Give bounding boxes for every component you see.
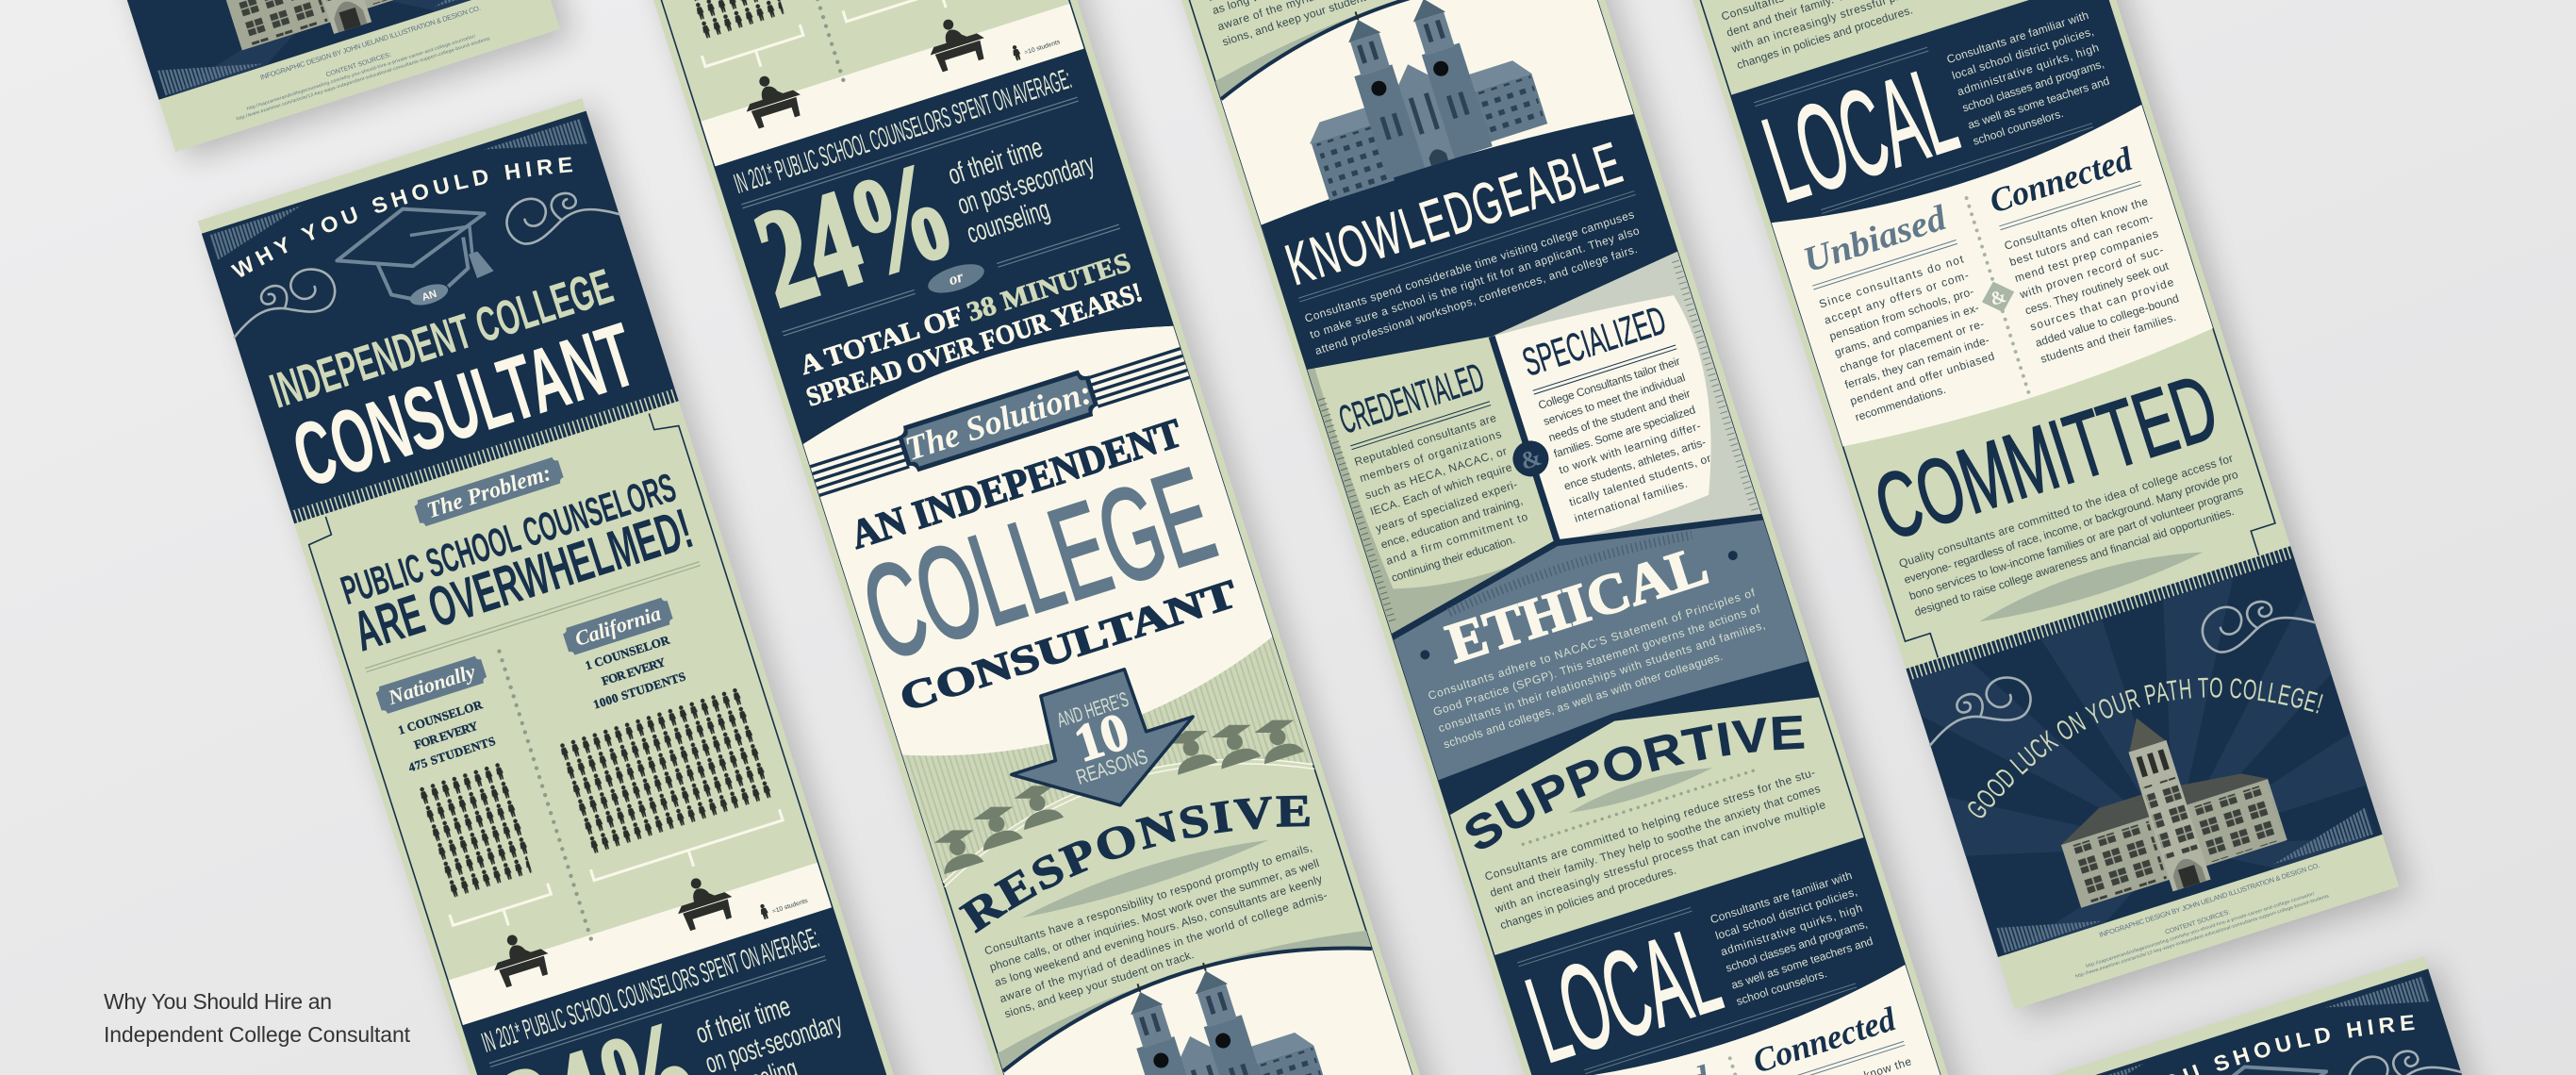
body: committed <box>1897 452 2251 619</box>
body: committed: designed to raise college awareness and financial aid opportunities. <box>1913 504 2236 619</box>
credits: INFOGRAPHIC DESIGN BY JOHN UELAND ILLUSTRATION & DESIGN CO. <box>2098 861 2320 939</box>
section: credentialed and specialized <box>1307 252 1762 636</box>
section: closing footer <box>1907 546 2383 980</box>
arrow: ten reasons: AND HERE'S <box>1054 687 1131 732</box>
heading: independent college: INDEPENDENT COLLEGE <box>264 259 619 420</box>
column: unbiased: recommendations. <box>1854 383 1947 424</box>
icon: graduation cap <box>328 186 505 326</box>
panel: credentialed: years of specialized experi- <box>1374 477 1519 536</box>
column: connected: added value to college-bound <box>2034 291 2181 350</box>
section: knowledgeable <box>1208 0 1685 393</box>
poster slice: column four, closing reasons <box>1687 0 2419 1026</box>
body: ethical: Good Practice (SPGP). This statement governs the actions of <box>1431 602 1762 719</box>
big number: 24 percent: 24% <box>740 132 969 336</box>
poster slice: header fragment, bottom right <box>2039 953 2530 1075</box>
column: unbiased: ferrals, they can remain inde- <box>1843 333 1990 391</box>
panel: credentialed: members of organizations <box>1358 427 1503 485</box>
swirl ornaments <box>1918 582 2315 746</box>
icons: graduates <box>925 699 1306 874</box>
body: local: administrative quirks, high <box>1956 41 2101 98</box>
poster slice: column one, header and problem <box>198 97 918 1075</box>
heading: committed: COMMITTED <box>1863 354 2229 559</box>
body: supportive: changes in policies and procedures. <box>1735 3 1914 72</box>
heading: college: COLLEGE <box>847 439 1230 688</box>
credits: http://sapcareerandcollegecounseling.com/why-you-should-hire-a-private-career-and-college-counselor/ <box>2086 891 2316 969</box>
body: local: school classes and programs, <box>1960 57 2105 115</box>
lens under responsive <box>1018 829 1271 925</box>
panel: credentialed: ence, education and training, <box>1379 494 1524 552</box>
body: ethical: Consultants adhere to NACAC'S Statement of Principles of <box>1427 586 1757 703</box>
column: connected <box>1984 139 2187 366</box>
stripes beside banner <box>810 349 1190 495</box>
panel: credentialed: continuing their education. <box>1390 533 1517 585</box>
arrow: ten reasons: REASONS <box>1073 744 1150 789</box>
panel: credentialed: and a firm commitment to <box>1384 510 1529 568</box>
body: ethical: schools and colleges, as well as with other colleagues. <box>1442 650 1725 751</box>
section: solution <box>803 326 1329 1020</box>
section: header <box>202 111 679 524</box>
heading: knowledgeable: KNOWLEDGEABLE <box>1279 130 1631 298</box>
body: knowledgeable: attend professional workshops, conferences, and college fairs. <box>1313 242 1639 357</box>
panel: specialized: tically talented students, or <box>1567 452 1712 509</box>
column: connected: best tutors and can recom- <box>2007 210 2155 269</box>
panel: specialized: ence students, athletes, artis- <box>1562 436 1708 493</box>
swirl ornaments <box>222 174 619 338</box>
panel: california <box>519 583 806 954</box>
column: unbiased: change for placement or re- <box>1838 317 1986 375</box>
body: responsive <box>983 840 1335 1020</box>
body: responsive: phone calls, or other inquiries. Most work over the summer, as well <box>988 856 1321 974</box>
panel: california: FOR EVERY <box>600 654 668 688</box>
poster slice: column three, reasons <box>1005 0 1996 1075</box>
poster slice: footer fragment, top left <box>0 0 752 279</box>
body: local: school counselors. <box>1972 107 2065 148</box>
column: unbiased: pendent and offer unbiased <box>1848 349 1996 407</box>
heading: ethical: ETHICAL <box>1439 534 1715 675</box>
panel: credentialed: IECA. Each of which require <box>1368 460 1513 518</box>
stat description: of their time <box>945 132 1047 191</box>
column: unbiased: accept any offers or com- <box>1823 269 1971 327</box>
legend: ten students: =10 students <box>771 898 809 916</box>
caption: Why You Should Hire an <box>104 989 332 1014</box>
stat description <box>945 119 1107 250</box>
section: unbiased and connected <box>1772 105 2216 456</box>
panel: specialized: families. Some are specialized <box>1552 403 1697 460</box>
body: local: Consultants are familiar with <box>1945 8 2090 66</box>
column: unbiased: pensation from schools, pro- <box>1827 285 1975 343</box>
column: unbiased: Unbiased <box>1799 198 1952 280</box>
body: committed: bono services to low-income families or are part of volunteer programs <box>1907 484 2245 603</box>
section: supportive <box>1720 0 2064 72</box>
or badge: or <box>947 267 966 289</box>
section: ethical <box>1379 478 1820 815</box>
panel: credentialed: Reputabled consultants are <box>1353 411 1498 469</box>
panel: california: 1000 STUDENTS <box>591 669 687 712</box>
panel: specialized <box>1484 252 1761 577</box>
badge: ampersand: & <box>1517 443 1544 475</box>
column: unbiased: grams, and companies in ex- <box>1833 301 1981 359</box>
credits: http://www.examiner.com/article/12-key-ways-independent-educational-consultants-support-college-bound-students <box>2074 893 2330 980</box>
body: responsive: sions, and keep your student on track. <box>1003 948 1196 1020</box>
body: ethical: consultants in their relationships with students and families, <box>1437 619 1767 735</box>
panel: nationally: Nationally <box>385 659 478 709</box>
arched heading: WHY YOU SHOULD HIRE <box>230 157 573 277</box>
badge: ampersand diamond <box>1977 276 2019 318</box>
credits <box>2064 861 2330 980</box>
panel: specialized: services to meet the individual <box>1542 371 1687 428</box>
icon: graduation cap: AN <box>421 289 438 304</box>
section: committed <box>1863 354 2260 650</box>
panel: specialized: to work with learning differ- <box>1557 419 1702 476</box>
caption <box>104 989 411 1047</box>
panel: credentialed: such as HECA, NACAC, or <box>1363 444 1509 502</box>
panel: nationally: 1 COUNSELOR <box>396 697 485 737</box>
heading: consultant: CONSULTANT <box>282 305 647 507</box>
panel: california: California <box>572 601 664 651</box>
poster slice: column two, stats and solution <box>649 0 1445 1075</box>
panel: nationally: FOR EVERY <box>412 719 480 752</box>
column: connected: Connected <box>1985 140 2138 221</box>
body: local: as well as some teachers and <box>1966 74 2111 132</box>
illustration: clock tower hall <box>2031 686 2292 919</box>
column: connected: mend test prep companies <box>2013 226 2160 285</box>
stat description: counseling <box>963 194 1053 250</box>
section: problem <box>306 418 832 1025</box>
section: local <box>1731 0 2148 242</box>
badge: ampersand <box>1509 437 1553 481</box>
body: ethical <box>1427 586 1773 751</box>
heading: an independent: AN INDEPENDENT <box>846 411 1187 558</box>
body: committed: Quality consultants are committed to the idea of college access for <box>1897 452 2235 571</box>
credits: CONTENT SOURCES: <box>2164 909 2231 936</box>
arrow: ten reasons: 10 <box>1067 702 1136 774</box>
or badge <box>925 258 987 299</box>
body: responsive: as long weekend and evening hours. Also, consultants are keenly <box>993 872 1324 989</box>
panel: credentialed <box>1307 313 1569 636</box>
column: connected: sources that can provide <box>2028 275 2175 334</box>
panel: specialized: College Consultants tailor their <box>1537 355 1681 412</box>
heading: consultant: CONSULTANT <box>895 572 1242 720</box>
stat description: on post-secondary <box>954 148 1098 221</box>
caption: Independent College Consultant <box>104 1022 411 1047</box>
body: responsive: aware of the myriad of deadlines in the world of college admis- <box>998 888 1329 1005</box>
body: knowledgeable: Consultants spend considerable time visiting college campuses <box>1303 207 1636 325</box>
stat line: 38 minutes: A TOTAL OF 38 MINUTES <box>797 247 1134 381</box>
body: local <box>1945 8 2116 148</box>
body: committed: everyone- regardless of race, income, or background. Many provide pro <box>1903 468 2240 587</box>
illustration: college building <box>1276 0 1550 202</box>
panel: nationally <box>374 654 578 998</box>
column: unbiased <box>1799 196 2002 424</box>
column: connected: with proven record of suc- <box>2017 243 2165 302</box>
panel: specialized: international families. <box>1573 477 1689 525</box>
heading: are overwhelmed: ARE OVERWHELMED! <box>346 497 700 663</box>
legend: ten students <box>758 890 810 920</box>
column: connected: Consultants often know the <box>2003 194 2150 253</box>
banner: the solution: The Solution: <box>900 373 1097 468</box>
column: connected: cess. They routinely seek out <box>2023 259 2171 317</box>
heading: public school counselors: PUBLIC SCHOOL COUNSELORS <box>336 465 681 614</box>
arrow: ten reasons <box>991 653 1212 834</box>
heading: responsive: RESPONSIVE <box>958 796 1310 934</box>
banner: the problem: The Problem: <box>424 461 554 523</box>
panel: specialized: SPECIALIZED <box>1517 297 1671 385</box>
badge: ampersand diamond: & <box>1988 286 2009 310</box>
closing message: GOOD LUCK ON YOUR PATH TO COLLEGE! <box>1968 677 2323 819</box>
body: supportive <box>1719 0 2069 72</box>
body: knowledgeable: to make sure a school is the right fit for an applicant. They also <box>1308 223 1642 341</box>
panel: credentialed: CREDENTIALED <box>1334 355 1489 442</box>
panel: california: 1 COUNSELOR <box>584 633 671 672</box>
section: statistics <box>715 48 1173 444</box>
column: unbiased: Since consultants do not <box>1817 252 1966 311</box>
panel: nationally: 475 STUDENTS <box>406 734 497 774</box>
body: local: local school district policies, <box>1950 25 2095 82</box>
stat line: four years: SPREAD OVER FOUR YEARS! <box>802 277 1146 413</box>
body: responsive: Consultants have a responsibility to respond promptly to emails, <box>983 841 1313 958</box>
panel: specialized: needs of the student and their <box>1547 387 1692 444</box>
column: connected: students and their families. <box>2039 310 2177 366</box>
